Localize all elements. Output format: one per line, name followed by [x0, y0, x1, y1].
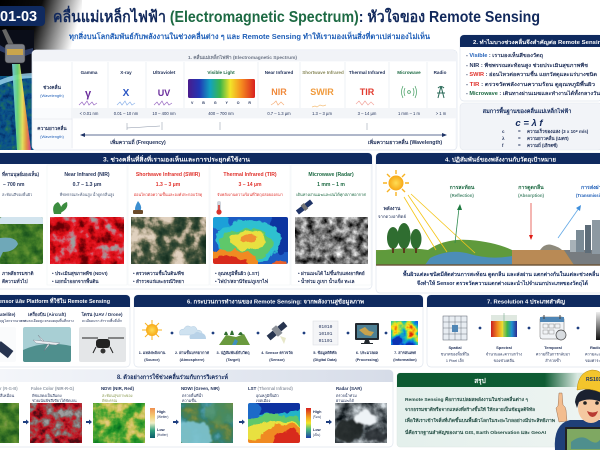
panel 1 heading: 1. คลื่นแม่เหล็กไฟฟ้า (Electromagnetic Spectrum)	[188, 53, 297, 60]
band card: TIR: Thermal Infrared (TIR)	[223, 172, 277, 178]
resolution: spatial	[441, 316, 470, 363]
panel 1: electromagnetic spectrum	[32, 50, 457, 150]
legend: NDVI: Low	[157, 428, 165, 432]
example: true color	[0, 386, 19, 443]
panel 2: why bands matter: - TIR : ตรวจวัดพลังงานความร้อน ดูอุณหภูมิพื้นผิว	[466, 79, 595, 89]
example: LST: LST (Thermal Infrared)	[248, 386, 293, 391]
flow dots	[171, 332, 387, 334]
band card: visible: ภาพสีธรรมชาติ	[2, 270, 34, 276]
panel 2: why bands matter: - Microwave : เดินทางผ่านเมฆและทำงานได้ทั้งกลางวัน	[466, 88, 600, 97]
arrow: absorption	[529, 203, 533, 240]
label: reflection: (Reflection)	[450, 193, 474, 198]
subtitle: ทุกสิ่งบนโลกสัมพันธ์กับพลังงานในช่วงคลื่นต่าง ๆ และ Remote Sensing ทำให้เรามองเห็นสิ่งที่ตาเปล่ามองไม่เห็น	[69, 30, 431, 41]
step: processing	[355, 323, 379, 362]
example: radar: Radar (SAR)	[336, 386, 362, 391]
example: radar	[333, 386, 388, 443]
panel: basic equation: c	[502, 129, 505, 134]
legend: NDVI: (Wetter)	[157, 415, 168, 419]
resolution: spectral	[486, 313, 522, 363]
icon: radio tower	[437, 86, 445, 98]
resolution: temporal: ความถี่ในการกลับมา	[536, 352, 570, 356]
label: absorption: (Absorption)	[518, 193, 544, 198]
wavelength axis: เพิ่มความยาวคลื่น (Wavelength)	[368, 138, 442, 146]
resolution: spatial: 1 Pixel เล็ก	[446, 357, 464, 363]
panel: basic equation: c = λ f	[515, 118, 543, 129]
panel 3: bands and applications: 3. ช่วงคลื่นที่สิ่งที่เรามองเห็นและการประยุกต์ใช้งาน	[103, 154, 251, 164]
band card: TIR: 3 – 14 µm	[238, 182, 262, 188]
panel 8: band combination examples: 8. ตัวอย่างการใช้ช่วงคลื่นร่วมกับการวิเคราะห์	[117, 372, 228, 381]
icon: sun	[383, 170, 409, 196]
mascot: boy with helmet and tablet	[555, 370, 600, 450]
band card: TIR: • อุณหภูมิพื้นผิว (LST)	[215, 269, 260, 277]
step: target	[216, 330, 250, 362]
example: true color: r (R-G-B)	[0, 386, 18, 391]
label: sun energy: จากดวงอาทิตย์	[378, 214, 406, 219]
icon: microwave	[402, 86, 416, 98]
band card: visible: – 700 nm	[3, 182, 25, 188]
step: information	[391, 321, 418, 362]
spectrum bands row	[33, 62, 456, 148]
resolution: spectral: Spectral	[496, 345, 512, 350]
band card: NIR: 0.7 – 1.3 µm	[73, 182, 102, 188]
band card: microwave: • ผ่านเมฆได้ ไม่ขึ้นกับแสงอาทิตย์	[298, 269, 365, 276]
wavelength ranges row: > 1 m	[436, 111, 447, 116]
title badge	[0, 6, 45, 26]
band card: NIR: Near Infrared (NIR)	[64, 172, 110, 178]
band card: microwave	[291, 165, 371, 285]
resolution: temporal	[536, 315, 570, 363]
spectrum bands row: (Wavelength)	[40, 93, 64, 98]
band card: microwave: 1 mm – 1 m	[317, 182, 345, 188]
label: sun energy: พลังงาน	[383, 205, 401, 212]
wavelength axis: ความยาวคลื่น	[37, 124, 67, 132]
example: radar: ตรวจน้ำท่วม	[336, 392, 357, 398]
spectrum bands row: UV	[158, 88, 170, 98]
example: NDWI: NDWI (Green, NIR)	[181, 386, 220, 391]
band card: TIR: • ไฟป่า/สถานีร้อน/ภูเขาไฟ	[215, 278, 269, 285]
platform: aircraft	[20, 311, 74, 362]
step: target: (Target)	[226, 358, 241, 362]
label: absorption	[518, 184, 544, 198]
legend: NDVI: High	[157, 410, 166, 414]
spectrum bands row: Shortwave Infrared	[302, 70, 344, 75]
band card: NIR: • ประเมินสุขภาพพืช (NDVI)	[52, 270, 108, 277]
wavelength ranges row: 1.3 – 3 µm	[312, 111, 332, 116]
label: reflection	[450, 183, 475, 198]
panel 2: why bands matter	[460, 35, 600, 101]
top-left space and earth image	[0, 0, 82, 150]
panel 2: why bands matter: - NIR : พืชพรรณสะท้อนสูง ช่วยประเมินสุขภาพพืช	[466, 62, 589, 70]
panel: summary: เพื่อให้เราเข้าใจสิ่งที่เกิดขึ้นบนพื้นผิวโลกในระยะไกลอย่างมีประสิทธิภาพ	[405, 416, 555, 423]
arrow: reflection	[455, 204, 462, 243]
icon: water drop on soil	[133, 201, 143, 214]
arrow: transmission	[558, 205, 581, 238]
spectrum bands row: X	[123, 88, 130, 99]
wavelength ranges row: 0.7 – 1.3 µm	[267, 111, 291, 116]
title badge: 01-03	[0, 9, 37, 25]
spectrum bands row: Radio	[434, 70, 447, 75]
wavelength ranges row: < 0.01 nm	[80, 111, 99, 116]
panel 2: why bands matter: - Visible : เรามองเห็นสีของวัตถุ	[466, 51, 543, 59]
panel 7: resolution: 7. Resolution 4 ประเภทสำคัญ	[487, 298, 565, 306]
panel: basic equation: ความยาวคลื่น (เมตร)	[527, 135, 569, 141]
caption: จึงทำให้ Sensor ตรวจวัดความแตกต่างและนำไปจำแนกประเภทของวัตถุได้	[416, 279, 589, 287]
panel: basic equation: =	[518, 143, 521, 148]
icon: thermometer	[216, 201, 222, 215]
example: radar: ผ่านเมฆได้	[336, 398, 354, 403]
band card: visible: ที่ตามนุษย์มองเห็น)	[2, 170, 39, 178]
label: sun energy	[378, 205, 406, 219]
step: digital data	[313, 321, 338, 362]
example: NDVI: พืชพรรณ	[102, 398, 118, 403]
spectrum bands row: Visible Light	[207, 70, 235, 75]
spectrum bands row: Gamma	[81, 70, 98, 75]
platform: drone: ละเอียดมาก สำรวจพื้นที่เล็ก	[82, 317, 122, 323]
example: true color: สีเหมือน	[0, 393, 14, 398]
panel 5: sensors and platforms	[0, 295, 130, 367]
panel: summary: Remote Sensing คือการแปลผลพลังงานในช่วงคลื่นต่าง ๆ	[405, 396, 529, 403]
step: sun: (Source)	[144, 358, 160, 362]
example: NDVI: NDVI (NIR, Red)	[101, 386, 134, 391]
platform: drone: โดรน (UAV / Drone)	[80, 311, 123, 317]
platform: aircraft: ความละเอียดสูง ครอบคลุมพื้นที่กลาง	[20, 318, 74, 324]
panel 8: band combination examples	[0, 370, 393, 450]
step: digital data: (Digital Data)	[313, 358, 337, 362]
step: sensor	[261, 320, 293, 362]
band card: SWIR: Shortwave Infrared (SWIR)	[136, 172, 200, 178]
label: transmission	[576, 184, 600, 198]
step: target: 3. ปฏิสัมพันธ์กับวัตถุ	[216, 349, 250, 356]
legend: LST: Low	[313, 428, 321, 432]
step: atmosphere	[175, 326, 210, 362]
band card: SWIR: อ่อนไหวต่อความชื้นและองค์ประกอบวัสดุ	[134, 190, 203, 198]
example: LST: เขตเมือง	[256, 398, 270, 403]
spectrum bands row: Ultraviolet	[153, 70, 176, 75]
step: information: 7. สารสนเทศ	[394, 350, 417, 355]
platform: aircraft: เครื่องบิน (Aircraft)	[28, 311, 67, 317]
ground scene	[376, 220, 600, 266]
step: atmosphere: 2. ผ่านชั้นบรรยากาศ	[175, 349, 210, 355]
panel: basic equation	[460, 103, 600, 150]
platform: drone	[79, 311, 126, 362]
spectrum bands row: V B G Y O R	[191, 101, 251, 105]
wavelength ranges row: 3 – 14 µm	[358, 111, 377, 116]
panel 6: process	[134, 295, 423, 367]
panel 7: resolution	[427, 295, 600, 367]
legend: LST: (เย็น)	[313, 431, 320, 437]
example: LST: อุณหภูมิพื้นผิว	[256, 392, 279, 399]
step: digital data: 5. ข้อมูลดิจิทัล	[313, 349, 337, 356]
icon: radar satellite	[295, 199, 314, 215]
band card: microwave: Microwave (Radar)	[308, 172, 354, 178]
title: คลื่นแม่เหล็กไฟฟ้า (Electromagnetic Spectrum): หัวใจของ Remote Sensing	[53, 5, 540, 26]
legend: NDVI: (Hotter)	[157, 433, 168, 437]
legend: NDVI	[150, 408, 168, 438]
band card: visible: ตีความทั่วไป	[2, 278, 28, 284]
spectrum bands row: ช่วงคลื่น	[43, 83, 62, 91]
band card: TIR: จับพลังงานความร้อนที่วัตถุปล่อยออกมา	[217, 192, 283, 198]
spectrum bands row: γ	[85, 88, 92, 100]
panel: basic equation: =	[518, 136, 521, 141]
resolution: radiometric	[585, 312, 600, 363]
example: false color: ช่วยเน้นพืชสีเขียวได้ชัดเจน	[32, 398, 77, 403]
band card: microwave: เดินทางผ่านเมฆและฝนได้ทุกสภาพอากาศ	[296, 192, 366, 198]
step: sun	[139, 320, 166, 362]
band card: NIR: พืชพรรณสะท้อนสูง น้ำดูดกลืนสูง	[59, 190, 114, 198]
panel: basic equation: f	[502, 143, 504, 148]
band card: visible	[0, 170, 43, 284]
step: digital data: 01010	[319, 324, 333, 330]
caption	[402, 269, 599, 287]
resolution: spectral: จำนวนและความกว้าง	[486, 352, 522, 356]
icon: leaves	[53, 202, 67, 214]
platform: satellite: ถุดูโลกจากอวกาศ	[0, 318, 27, 324]
label: absorption: การดูดกลืน	[518, 184, 544, 192]
band card: SWIR: • สำรวจแร่และธรณีวิทยา	[133, 278, 184, 284]
step: atmosphere: (Atmosphere)	[180, 358, 205, 362]
example: false color: False Color (NIR-R-G)	[31, 386, 75, 391]
panel: basic equation: ความถี่ (เฮิรตซ์)	[527, 142, 558, 148]
panel 2: why bands matter: - SWIR : อ่อนไหวต่อความชื้น แยกวัสดุและแร่บางชนิด	[466, 69, 597, 78]
wavelength ranges row: 0.01 – 10 nm	[114, 111, 139, 116]
step: processing: (Processing)	[356, 358, 379, 362]
rays	[404, 194, 475, 253]
thermal map image	[213, 217, 288, 264]
wavelength ranges row: 1 mm – 1 m	[398, 111, 421, 116]
panel 6: process: 6. กระบวนการทำงานของ Remote Sensing: จากพลังงานสู่ข้อมูลภาพ	[187, 298, 364, 306]
flow dots	[479, 327, 579, 329]
band card: TIR	[210, 164, 290, 286]
step: processing: 6. ประมวลผล	[356, 349, 379, 355]
example: LST	[248, 386, 300, 443]
spectrum bands row: NIR	[271, 87, 287, 97]
band card: SWIR: • ตรวจความชื้นในดิน/พืช	[133, 269, 185, 276]
wavelength ranges row: 10 – 400 nm	[152, 111, 176, 116]
band card: visible: สะท้อนสีของพื้นผิว	[2, 191, 32, 197]
step: digital data: 10101	[319, 331, 333, 337]
example: false color	[30, 386, 82, 443]
example: NDWI: ตรวจพื้นที่น้ำ	[182, 392, 203, 398]
wavelength ranges row	[72, 108, 456, 118]
spectrum bands row: Microwave	[397, 70, 421, 75]
resolution: temporal: Temporal	[544, 345, 562, 350]
wavelength ranges row: 400 – 700 nm	[208, 111, 234, 116]
resolution: temporal: สำรวจซ้ำ	[545, 357, 561, 363]
flow arrows	[23, 420, 332, 424]
example: NDWI	[181, 386, 233, 443]
band card: NIR: • แยกน้ำออกจากพื้นดิน	[52, 277, 99, 284]
spectrum bands row: SWIR	[310, 87, 334, 97]
panel: summary: นี่คือรากฐานสำคัญของงาน GIS, Earth Observation และ GeoAI	[405, 429, 546, 436]
legend: LST: (ร้อน)	[313, 415, 321, 419]
panel 3: bands and applications	[0, 153, 372, 289]
caption: พื้นผิวแต่ละชนิดมีสัดส่วนการสะท้อน ดูดกลืน และส่งผ่าน แตกต่างกันในแต่ละช่วงคลื่น	[402, 269, 599, 279]
wavelength axis: (Wavelength)	[40, 134, 64, 139]
panel: basic equation: =	[518, 129, 521, 134]
wavelength axis	[33, 119, 455, 149]
band card: SWIR: 1.3 – 3 µm	[156, 182, 181, 188]
resolution: spatial: ขนาดของพื้นที่ใน	[441, 350, 470, 356]
band card: SWIR	[128, 165, 209, 285]
label: reflection: การสะท้อน	[450, 183, 475, 191]
band card: microwave: • น้ำท่วม ภูเขา น้ำแข็ง ทะเล	[298, 277, 355, 285]
example: NDWI: ความชื้น	[182, 397, 197, 403]
panel 4: energy interaction: 4. ปฏิสัมพันธ์ของพลังงานกับวัตถุเป้าหมาย	[445, 156, 557, 164]
panel 2: why bands matter: 2. ทำไมบางช่วงคลื่นจึงสำคัญต่อ Remote Sensing	[473, 38, 600, 46]
panel: basic equation: λ	[502, 136, 505, 141]
step: sun: 1. แหล่งพลังงาน	[139, 350, 166, 355]
spectrum bands row: Thermal Infrared	[349, 70, 385, 75]
legend: LST	[306, 408, 322, 438]
resolution: spectral: ของช่วงคลื่น	[494, 358, 515, 363]
spectrum bands row: Near Infrared	[265, 70, 293, 75]
example: NDVI	[93, 386, 145, 443]
resolution: spatial: Spatial	[448, 345, 462, 350]
step: digital data: 01101	[319, 338, 333, 344]
example: false color: พืชแสดงเป็นสีแดง	[32, 392, 62, 398]
panel 5: sensors and platforms: ensor และ Platform ที่ใช้ใน Remote Sensing	[0, 297, 111, 305]
panel: summary: จากธรรมชาติหรือจากแหล่งที่สร้างขึ้นให้ ให้กลายเป็นข้อมูลดิจิทัล	[405, 405, 535, 413]
step: sensor: (Sensor)	[269, 358, 285, 362]
panel: summary	[397, 370, 600, 450]
panel: basic equation: สมการพื้นฐานของคลื่นแม่เหล็กไฟฟ้า	[483, 106, 571, 115]
panel: basic equation: ความเร็วของแสง (3 x 10⁸ m/s)	[527, 127, 589, 134]
panel: summary: สรุป	[474, 377, 486, 385]
icon: satellite	[0, 29, 33, 63]
legend: LST: High	[313, 410, 322, 414]
step: sensor: 4. Sensor ตรวจวัด	[261, 350, 293, 355]
platform: satellite	[0, 312, 27, 362]
spectrum bands row: X-ray	[120, 70, 132, 75]
panel 4: energy interaction	[376, 153, 600, 293]
step: information: (Information)	[393, 358, 417, 362]
spectrum bands row: TIR	[360, 87, 375, 97]
band card: NIR	[47, 165, 127, 285]
wavelength axis: เพิ่มความถี่ (Frequency)	[110, 138, 166, 146]
platform: satellite: atellite)	[0, 312, 16, 317]
example: NDVI: สะท้อนสุขภาพของ	[102, 393, 133, 399]
